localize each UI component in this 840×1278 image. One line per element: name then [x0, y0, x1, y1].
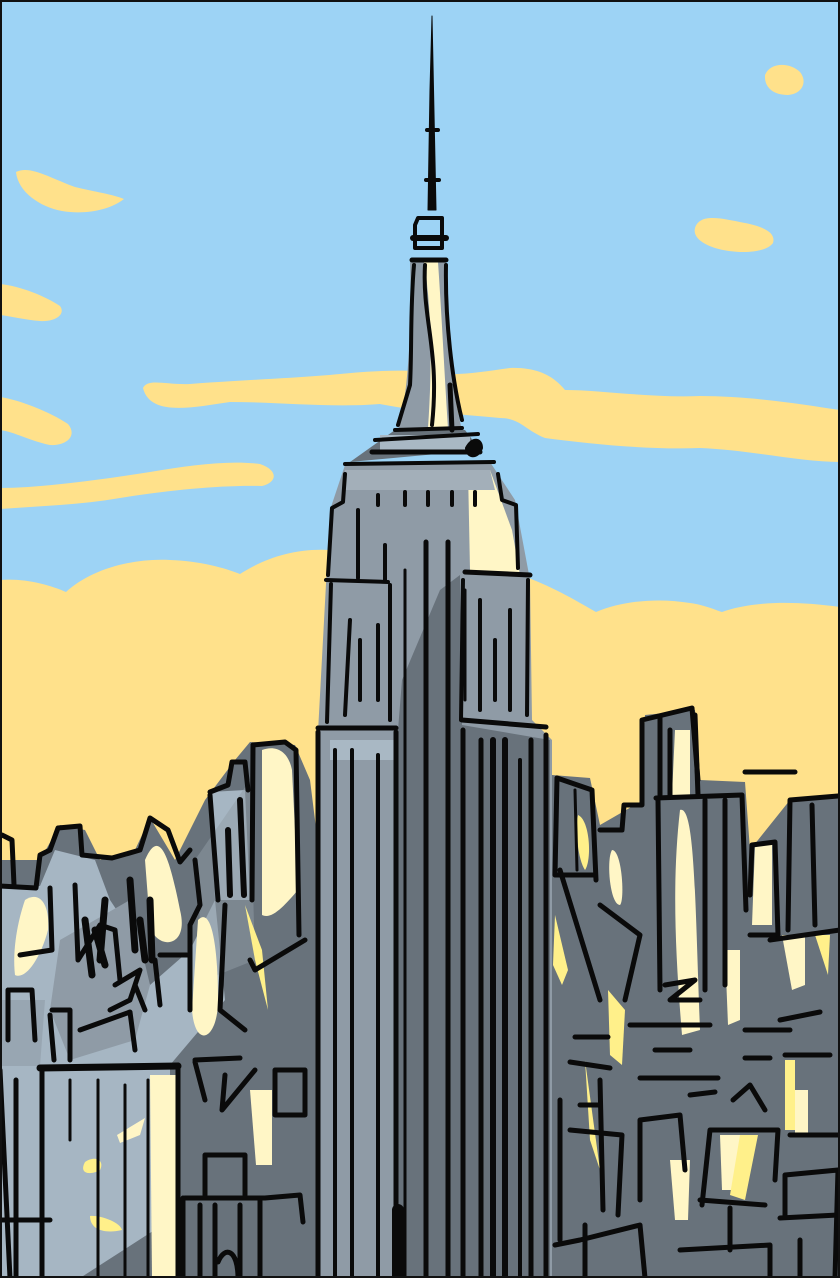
yellow highlights left [83, 905, 268, 1231]
left buildings light [0, 790, 250, 1278]
tower base [318, 730, 546, 1278]
right buildings highlights [609, 730, 808, 1220]
spire base knob [466, 440, 482, 456]
left skyline ink [0, 742, 305, 1278]
cream highlights left [14, 748, 298, 1278]
yellow highlights right [553, 815, 830, 1200]
right skyline ink [555, 708, 840, 1278]
background skyline shadows [0, 710, 838, 1278]
mid-gray left masses [0, 780, 255, 1066]
spire shaft [345, 265, 494, 464]
icon: spire [412, 16, 446, 260]
tower body [318, 262, 552, 1278]
clouds [0, 65, 840, 860]
crown windows [318, 474, 546, 1278]
